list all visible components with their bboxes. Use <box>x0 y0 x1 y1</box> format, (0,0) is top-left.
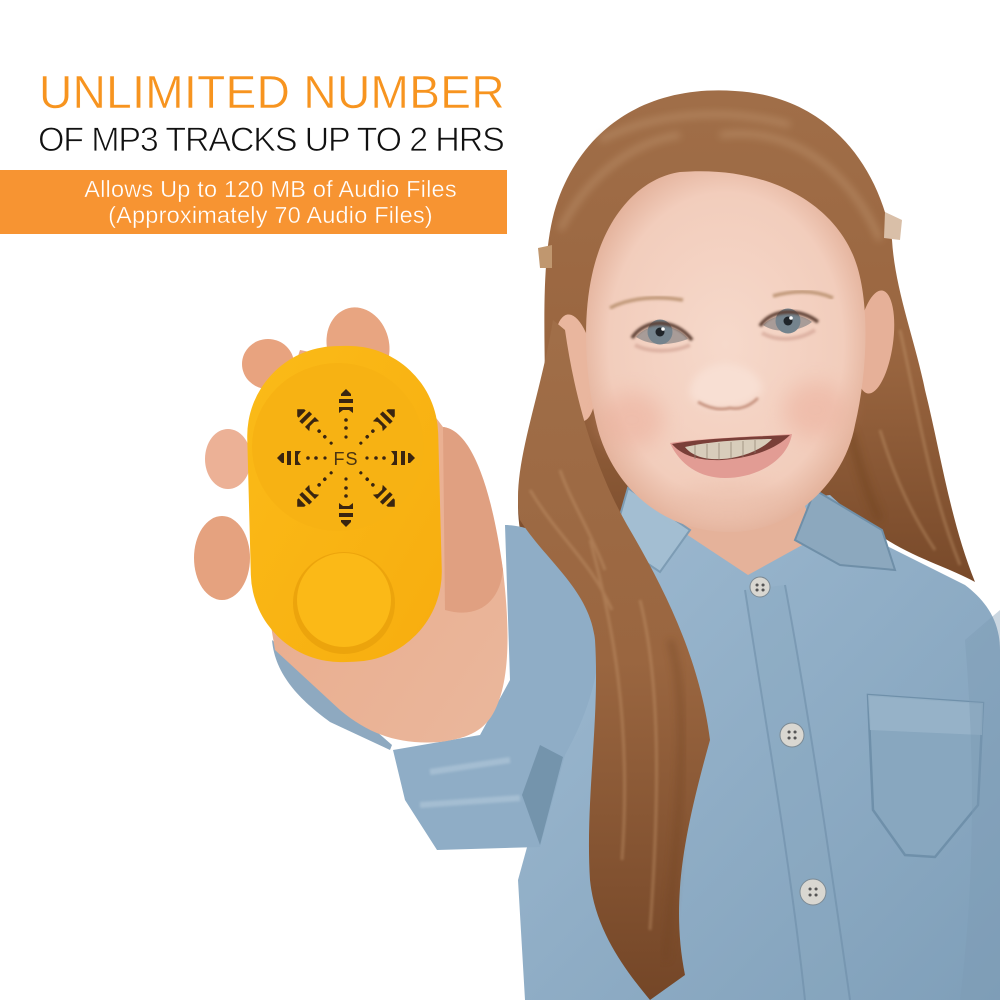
collar <box>613 488 895 572</box>
round push button <box>293 552 395 654</box>
nose <box>690 363 762 408</box>
banner text: Allows Up to 120 MB of Audio Files <box>84 176 457 202</box>
face <box>548 171 900 532</box>
speaker pattern <box>277 389 415 527</box>
mouth <box>670 434 792 478</box>
device: yellow audio button <box>245 344 444 664</box>
brows <box>610 298 683 308</box>
subheading: mp3 tracks: OF MP3 TRACKS UP TO 2 HRS <box>38 121 504 159</box>
hair back <box>518 90 975 610</box>
hand <box>194 300 508 743</box>
eyes <box>636 326 688 344</box>
neck <box>655 490 815 575</box>
banner: audio file capacity <box>0 170 507 234</box>
long hair strand front <box>518 320 710 1000</box>
sleeve <box>272 525 599 850</box>
device label: FS <box>333 449 359 469</box>
cheeks <box>600 392 664 448</box>
buttons <box>750 577 826 905</box>
banner text: (Approximately 70 Audio Files) <box>108 202 433 228</box>
heading: unlimited number: UNLIMITED NUMBER <box>39 66 505 118</box>
shirt body <box>518 495 1000 1000</box>
banner text <box>84 176 457 228</box>
